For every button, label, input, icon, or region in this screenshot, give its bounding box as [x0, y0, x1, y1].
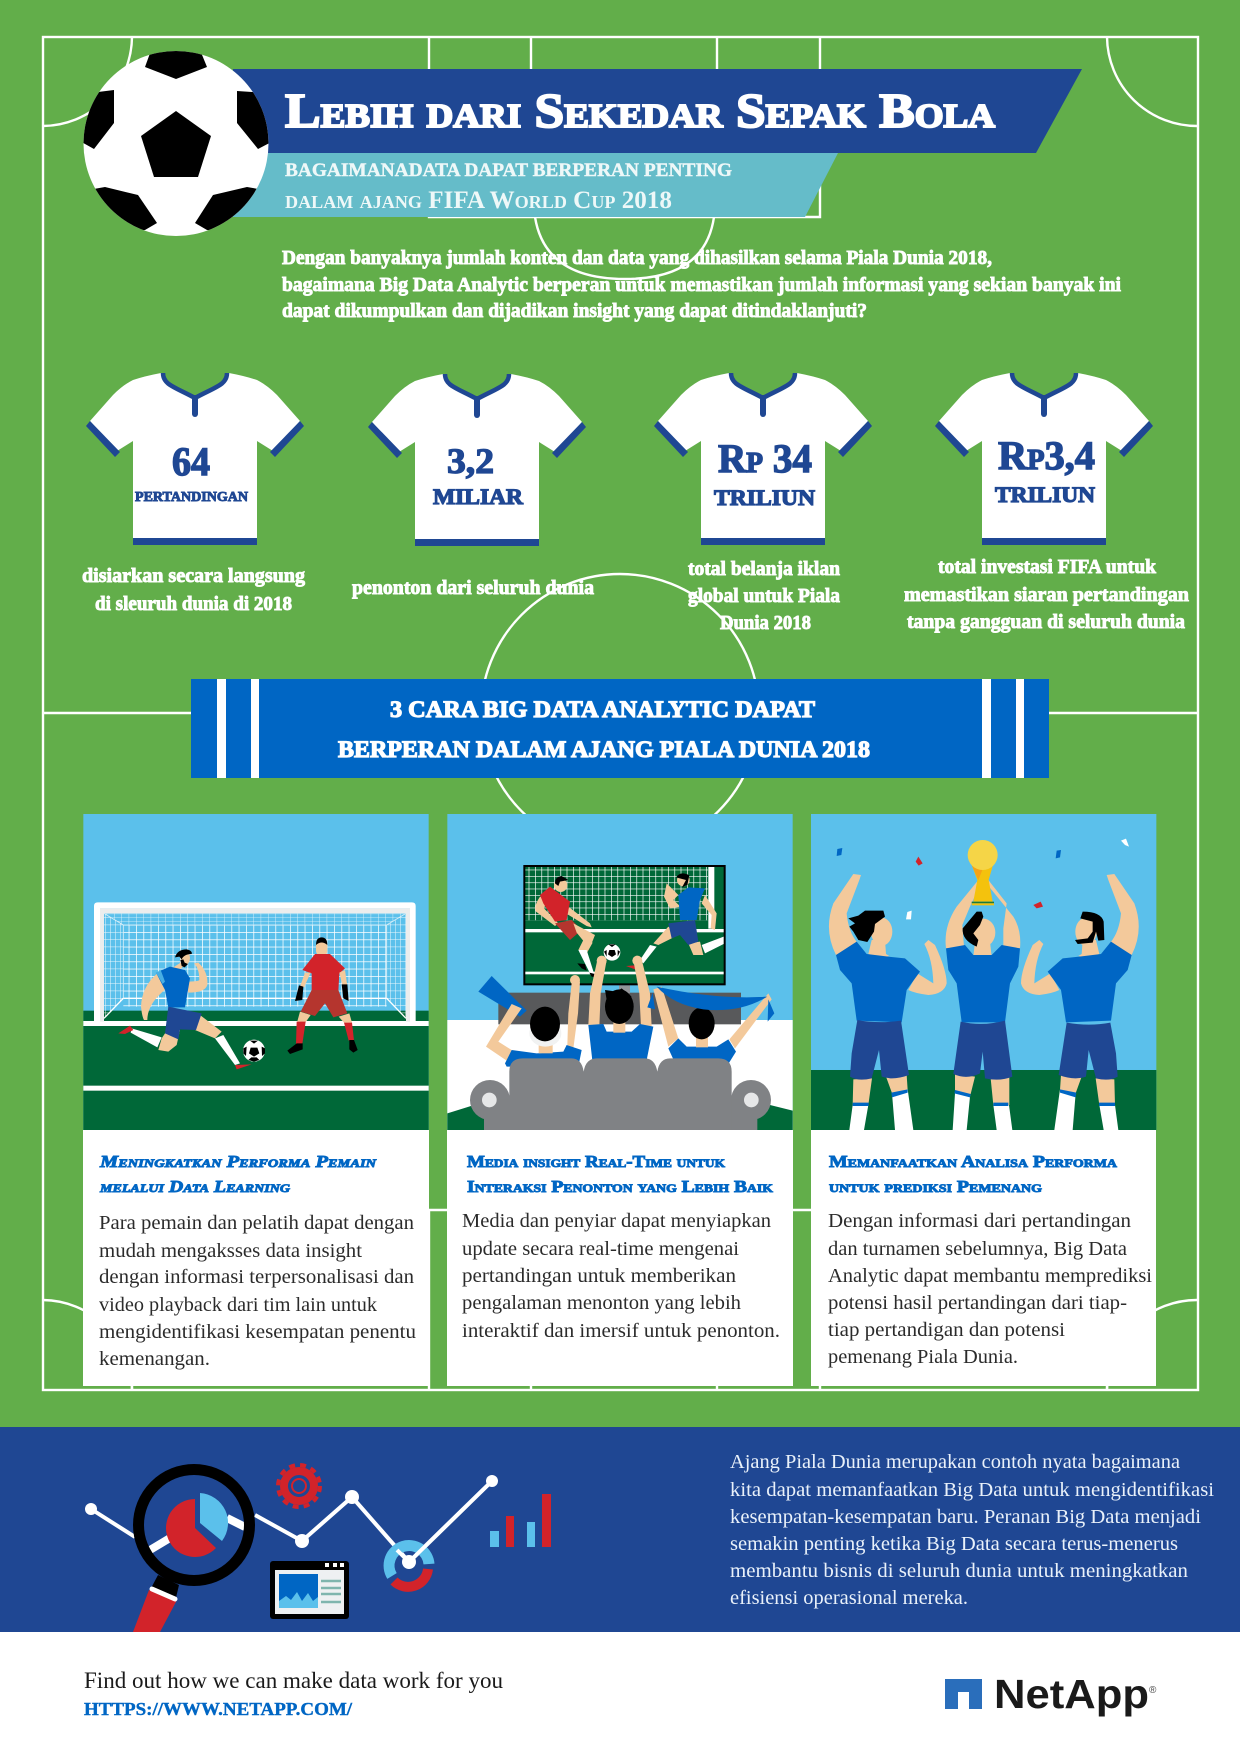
title: Lebih dari Sekedar Sepak Bola: [285, 83, 995, 138]
section banner: [191, 679, 1049, 778]
card 2 heading: Interaksi Penonton yang Lebih Baik: [467, 1177, 774, 1196]
stat jersey: Rp3,4 triliun: Rp3,4: [998, 433, 1095, 478]
stat jersey: Rp 34 triliun: TRILIUN: [714, 485, 815, 510]
conclusion text: kesempatan-kesempatan baru. Peranan Big Data menjadi: [730, 1506, 1201, 1528]
url: HTTPS://WWW.NETAPP.COM/: [84, 1699, 353, 1719]
illustration: fans watching tv: [447, 814, 793, 1130]
card 3 body text: dan turnamen sebelumnya, Big Data: [828, 1238, 1127, 1260]
subtitle ribbon: [233, 153, 838, 217]
netapp logo: ®: [1149, 1685, 1157, 1696]
card 3 body text: pemenang Piala Dunia.: [828, 1346, 1018, 1368]
card 1 body text: video playback dari tim lain untuk: [99, 1294, 377, 1316]
section heading: 3 CARA BIG DATA ANALYTIC DAPAT: [390, 697, 815, 722]
stat caption 4: memastikan siaran pertandingan: [904, 584, 1189, 606]
title banner: [233, 69, 1082, 153]
stat jersey: Rp 34 triliun: [654, 373, 872, 545]
right player: [1021, 874, 1139, 1130]
conclusion text: semakin penting ketika Big Data secara terus-menerus: [730, 1533, 1178, 1555]
stat jersey: 64 pertandingan: [86, 373, 304, 545]
stat caption 2: penonton dari seluruh dunia: [352, 577, 594, 599]
card 2 heading: [467, 1152, 774, 1196]
stat caption 3: global untuk Piala: [688, 585, 840, 607]
subtitle line 1: BAGAIMANADATA DAPAT BERPERAN PENTING: [285, 160, 732, 181]
cabinet: [498, 993, 741, 1024]
conclusion text: kita dapat memanfaatkan Big Data untuk mengidentifikasi: [730, 1479, 1214, 1501]
card 1 heading: [99, 1152, 378, 1196]
card 1 body text: kemenangan.: [99, 1348, 210, 1370]
goalkeeper: [287, 937, 358, 1054]
intro paragraph: Dengan banyaknya jumlah konten dan data yang dihasilkan selama Piala Dunia 2018,: [282, 247, 992, 269]
conclusion text: membantu bisnis di seluruh dunia untuk meningkatkan: [730, 1560, 1188, 1582]
football pitch lines: [43, 37, 1198, 1390]
centre fan: [588, 956, 653, 1063]
panel: card 3: [811, 814, 1156, 1386]
stat jersey: 3,2 miliar: 3,2: [447, 441, 494, 481]
stat caption 3: [688, 558, 840, 634]
card 3 body text: tiap pertandigan dan potensi: [828, 1319, 1065, 1341]
card 1 body text: [99, 1212, 416, 1370]
trophy: [968, 840, 998, 905]
stat jersey: 64 pertandingan: PERTANDINGAN: [135, 490, 248, 505]
card 1 body text: dengan informasi terpersonalisasi dan: [99, 1266, 414, 1288]
card 3 heading: [829, 1152, 1117, 1196]
card 2 body text: [462, 1210, 780, 1342]
stat jersey: Rp3,4 triliun: [935, 373, 1153, 545]
tv screen: [523, 865, 726, 985]
stat caption 4: [904, 556, 1189, 633]
intro paragraph: dapat dikumpulkan dan dijadikan insight yang dapat ditindaklanjuti?: [282, 300, 867, 322]
ball: [243, 1040, 265, 1062]
bar chart: [490, 1494, 551, 1547]
sofa: [470, 1058, 771, 1130]
card 3 body text: potensi hasil pertandingan dari tiap-: [828, 1292, 1127, 1314]
icon: magnifier with pie chart: [133, 1470, 250, 1632]
stat jersey: 3,2 miliar: MILIAR: [433, 484, 524, 509]
section heading: [338, 697, 870, 762]
left fan with horn: [478, 975, 582, 1067]
card 2 body text: Media dan penyiar dapat menyiapkan: [462, 1210, 771, 1232]
right fan with scarf: [647, 987, 774, 1067]
card 3 body text: Dengan informasi dari pertandingan: [828, 1210, 1131, 1232]
panel: conclusion band: [0, 1427, 1240, 1632]
card 2 heading: Media insight Real-Time untuk: [467, 1152, 726, 1171]
stat caption 3: total belanja iklan: [688, 558, 840, 580]
card 3 body text: [828, 1210, 1152, 1368]
confetti: [837, 839, 1129, 919]
netapp logo: [945, 1671, 1157, 1717]
illustration: striker and goalkeeper: [83, 814, 429, 1130]
icon: donut gauge: [389, 1481, 492, 1587]
icon: soccer ball: [78, 45, 275, 238]
stat caption 1: di sleuruh dunia di 2018: [95, 593, 292, 615]
panel: card 1: [83, 814, 429, 1386]
left player: [829, 874, 947, 1130]
card 2 body text: interaktif dan imersif untuk penonton.: [462, 1320, 780, 1342]
card 1 heading: Meningkatkan Performa Pemain: [99, 1152, 378, 1171]
stat caption 1: disiarkan secara langsung: [82, 565, 305, 587]
card 1 body text: mudah mengaksses data insight: [99, 1240, 362, 1262]
stat caption 1: [82, 565, 305, 615]
icon: dashboard window: [270, 1561, 349, 1619]
centre player with trophy: [946, 840, 1020, 1130]
striker: [118, 949, 252, 1069]
card 3 heading: Memanfaatkan Analisa Performa: [829, 1152, 1117, 1171]
card 2 body text: update secara real-time mengenai: [462, 1238, 739, 1260]
conclusion text: efisiensi operasional mereka.: [730, 1587, 968, 1609]
line chart: [85, 1475, 498, 1562]
stat jersey: 64 pertandingan: 64: [172, 439, 210, 484]
card 3 heading: untuk prediksi Pemenang: [829, 1177, 1042, 1196]
stat jersey: Rp3,4 triliun: TRILIUN: [995, 482, 1095, 507]
stat caption 3: Dunia 2018: [720, 612, 811, 634]
panel: card 2: [447, 814, 793, 1386]
stat jersey: 3,2 miliar: [368, 374, 586, 546]
subtitle line 2: dalam ajang FIFA World Cup 2018: [285, 187, 672, 214]
stat caption 4: total investasi FIFA untuk: [938, 556, 1157, 578]
conclusion text: [730, 1451, 1214, 1609]
section heading: BERPERAN DALAM AJANG PIALA DUNIA 2018: [338, 737, 870, 762]
card 3 body text: Analytic dapat membantu memprediksi: [828, 1265, 1152, 1287]
conclusion text: Ajang Piala Dunia merupakan contoh nyata bagaimana: [730, 1451, 1180, 1473]
card 1 body text: Para pemain dan pelatih dapat dengan: [99, 1212, 414, 1234]
card 2 body text: pengalaman menonton yang lebih: [462, 1292, 741, 1314]
netapp logo: NetApp: [994, 1671, 1149, 1717]
illustration: players with trophy: [811, 814, 1156, 1130]
intro paragraph: bagaimana Big Data Analytic berperan untuk memastikan jumlah informasi yang sekian banyak ini: [282, 274, 1121, 296]
intro paragraph: [282, 247, 1121, 322]
call to action: Find out how we can make data work for you: [84, 1668, 503, 1693]
card 1 heading: melalui Data Learning: [99, 1177, 290, 1196]
stat caption 4: tanpa gangguan di seluruh dunia: [907, 611, 1185, 633]
card 2 body text: pertandingan untuk memberikan: [462, 1265, 736, 1287]
card 1 body text: mengidentifikasi kesempatan penentu: [99, 1321, 416, 1343]
icon: gear: [278, 1465, 320, 1507]
footer background: [0, 1632, 1240, 1754]
stat jersey: Rp 34 triliun: Rp 34: [718, 436, 812, 481]
